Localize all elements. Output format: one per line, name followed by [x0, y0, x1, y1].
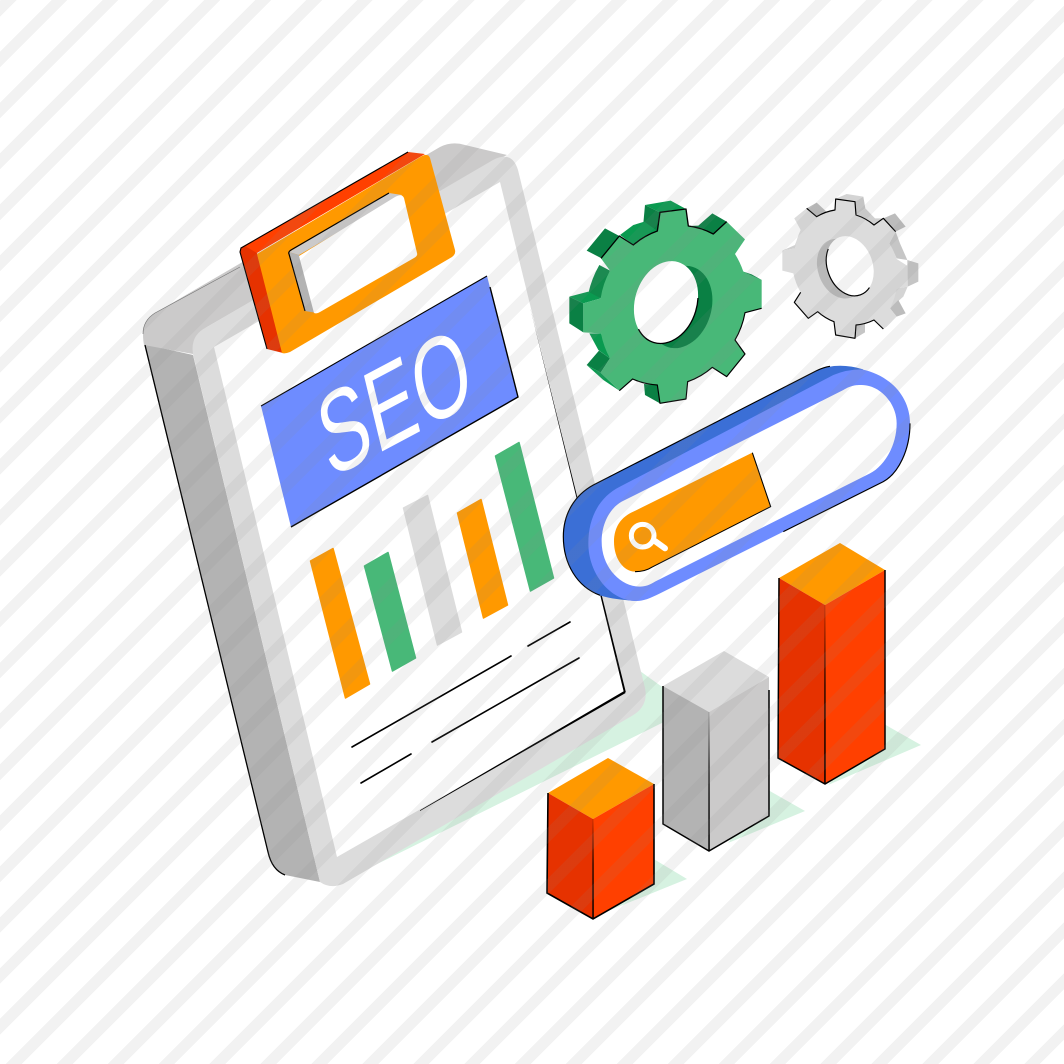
clipboard side: top bevel — [143, 143, 507, 354]
grey gear outline — [794, 199, 896, 338]
clipboard front frame — [193, 157, 646, 886]
search bar depth — [563, 366, 863, 601]
3D bar: grey — [663, 651, 769, 851]
search bar outline — [563, 366, 910, 595]
clip left side — [240, 246, 283, 353]
icon: magnifier — [631, 524, 665, 548]
gear: green — [569, 201, 762, 403]
green gear hole — [624, 253, 722, 356]
clipboard paper — [214, 182, 625, 857]
search button outline — [635, 453, 771, 572]
paper text lines — [352, 622, 579, 783]
ground shadows — [335, 671, 921, 911]
paper bar chart — [310, 442, 554, 698]
3D bar: small red — [547, 758, 654, 919]
search button — [614, 453, 771, 572]
SEO text: SEO — [306, 302, 483, 503]
search bar field — [602, 385, 897, 587]
clip hole — [289, 193, 417, 313]
green gear side — [569, 201, 762, 403]
search bar — [563, 366, 910, 601]
grey gear hole — [809, 229, 882, 305]
grey gear side — [782, 194, 918, 338]
SEO banner — [261, 276, 518, 527]
green gear outline — [601, 209, 762, 403]
clip — [240, 152, 455, 353]
clipboard side: left edge — [144, 344, 320, 882]
grey gear face — [782, 199, 908, 338]
clipboard — [143, 143, 646, 886]
3D bar: tall red — [778, 543, 885, 784]
search bar frame — [588, 369, 910, 601]
green gear face — [583, 209, 762, 403]
paper outline — [143, 267, 626, 811]
clip top side — [240, 152, 425, 253]
clip front — [257, 155, 455, 353]
gear: grey — [782, 194, 918, 338]
clipboard edge outline — [145, 345, 285, 875]
clip outline — [240, 152, 408, 349]
